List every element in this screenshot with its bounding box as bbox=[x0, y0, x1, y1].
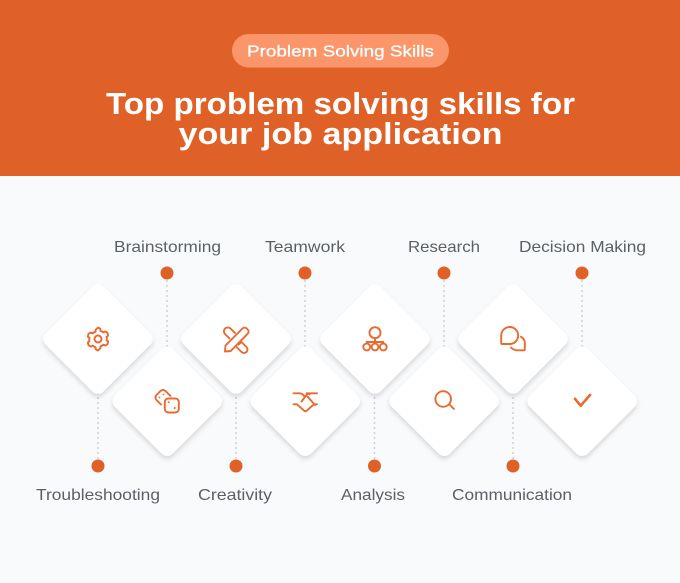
header band bbox=[0, 0, 680, 176]
connector: Analysis bbox=[368, 392, 381, 472]
connector: Decision Making bbox=[576, 266, 588, 348]
card: Analysis bbox=[317, 281, 433, 397]
card: Teamwork bbox=[247, 343, 363, 459]
title bbox=[106, 86, 575, 151]
icon: speech bubbles bbox=[501, 327, 525, 350]
card: Brainstorming bbox=[109, 343, 225, 459]
label: Communication: Communication bbox=[452, 487, 572, 504]
badge: Problem Solving Skills: Problem Solving Skills bbox=[247, 44, 434, 60]
badge: Problem Solving Skills bbox=[232, 34, 449, 68]
label: Troubleshooting: Troubleshooting bbox=[36, 487, 160, 504]
label: Brainstorming: Brainstorming bbox=[114, 239, 221, 256]
icon: dice bbox=[155, 390, 179, 412]
icon: hierarchy bbox=[363, 327, 387, 350]
icon: handshake bbox=[294, 393, 317, 411]
connector: Research bbox=[438, 266, 450, 348]
label: Research: Research bbox=[408, 239, 480, 256]
connector: Troubleshooting bbox=[92, 392, 104, 472]
title: your job application bbox=[178, 116, 502, 151]
connector: Communication bbox=[506, 392, 520, 472]
card: Troubleshooting bbox=[40, 281, 156, 397]
card: Creativity bbox=[178, 281, 294, 397]
card: Research bbox=[386, 343, 502, 459]
label: Decision Making: Decision Making bbox=[519, 239, 646, 256]
connector: Brainstorming bbox=[160, 266, 174, 348]
label: Teamwork: Teamwork bbox=[265, 239, 346, 256]
card: Decision Making bbox=[524, 343, 640, 459]
card: Communication bbox=[455, 281, 571, 397]
icon: pencil and ruler bbox=[224, 327, 249, 353]
connector: Creativity bbox=[230, 392, 242, 472]
title: Top problem solving skills for bbox=[106, 86, 575, 121]
icon: gear bbox=[88, 328, 108, 350]
icon: check mark bbox=[575, 395, 590, 406]
label: Analysis: Analysis bbox=[341, 487, 405, 504]
icon: magnifier bbox=[435, 391, 454, 409]
connector: Teamwork bbox=[298, 266, 312, 348]
label: Creativity: Creativity bbox=[198, 487, 272, 504]
